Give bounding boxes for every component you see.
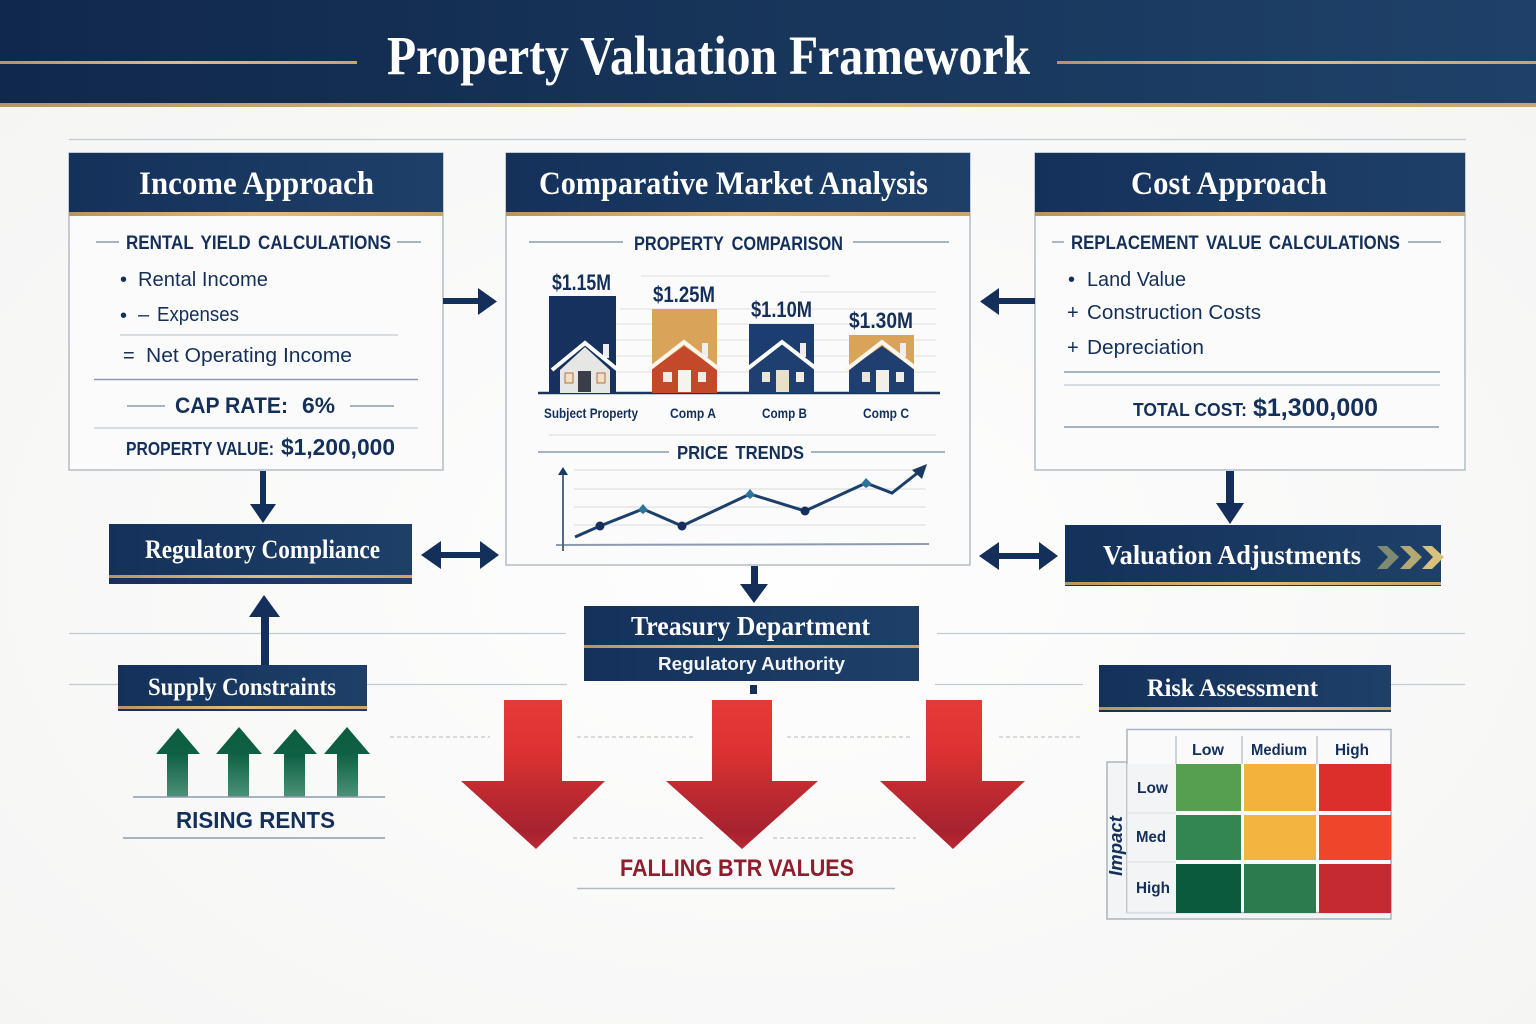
- arrow: market analysis to valuation adjustments: [979, 542, 1058, 570]
- axis labels: properties: Comp B: [762, 405, 807, 421]
- text: cost calculation lines: [1064, 269, 1440, 385]
- axis labels: properties: [544, 405, 909, 421]
- text: total cost: [1133, 394, 1378, 422]
- text: property value: $1,200,000: [281, 434, 395, 460]
- arrow: regulatory to market analysis: [421, 541, 499, 569]
- text: regulatory authority: Regulatory Authority: [658, 654, 845, 674]
- box: valuation adjustments: Valuation Adjustments: [1103, 540, 1361, 570]
- column labels: [1192, 742, 1369, 759]
- text: total cost: $1,300,000: [1253, 394, 1378, 422]
- text: income calculation lines: =: [123, 345, 135, 367]
- text: cap rate: 6%: [302, 393, 335, 418]
- text: cost calculation lines: +: [1067, 337, 1079, 359]
- panel: cost approach: [1035, 153, 1465, 470]
- heading: comparative market analysis: Comparative Market Analysis: [539, 166, 928, 202]
- text: cost calculation lines: Construction Costs: [1087, 302, 1261, 324]
- icon: falling value arrows: [461, 700, 1025, 849]
- arrow: income to market analysis: [443, 288, 497, 315]
- text: income calculation lines: –: [138, 304, 150, 326]
- axis labels: properties: Subject Property: [544, 405, 638, 421]
- panel: income approach: [69, 153, 443, 470]
- text: income calculation lines: Net Operating Income: [146, 345, 352, 367]
- subheading: replacement value calculations: REPLACEMENT VALUE CALCULATIONS: [1071, 233, 1400, 254]
- axis label: impact: Impact: [1106, 815, 1126, 876]
- text: total cost: TOTAL COST:: [1133, 400, 1247, 420]
- heading: income approach: Income Approach: [139, 166, 374, 202]
- text: cost calculation lines: Depreciation: [1087, 337, 1204, 359]
- text: property value: PROPERTY VALUE:: [126, 439, 274, 459]
- text: income calculation lines: Rental Income: [138, 269, 268, 291]
- text: income calculation lines: •: [120, 305, 127, 327]
- row labels: [1136, 780, 1170, 897]
- bar: comp C: [846, 308, 918, 393]
- title: Property Valuation Framework: [387, 25, 1030, 86]
- panel: comparative market analysis: [506, 153, 970, 565]
- row labels: High: [1136, 880, 1170, 897]
- line chart: price trends: [556, 464, 929, 551]
- box: regulatory compliance: Regulatory Compliance: [145, 535, 380, 564]
- subheading: rental yield calculations: RENTAL YIELD CALCULATIONS: [126, 233, 391, 254]
- text: income calculation lines: [94, 269, 418, 380]
- box: supply constraints: Supply Constraints: [148, 674, 336, 701]
- bar: subject property: [549, 270, 618, 393]
- icon: gold chevrons: [1377, 546, 1444, 569]
- icon: rising rents arrows: [156, 727, 370, 797]
- text: cost calculation lines: •: [1068, 269, 1075, 291]
- bar chart: property comparison: [538, 270, 940, 421]
- column labels: High: [1335, 742, 1369, 759]
- row labels: Low: [1137, 780, 1169, 797]
- text: cap rate: CAP RATE:: [175, 393, 288, 418]
- box: risk assessment: Risk Assessment: [1147, 675, 1319, 702]
- text: income calculation lines: Expenses: [157, 304, 239, 326]
- arrow: cost to valuation adjustments: [1216, 471, 1244, 524]
- title banner: [0, 0, 1536, 107]
- bar: comp B: [746, 297, 818, 393]
- box: risk assessment: [1099, 665, 1391, 712]
- subheading: price trends: PRICE TRENDS: [677, 443, 804, 463]
- subheading: property comparison: PROPERTY COMPARISON: [634, 234, 843, 255]
- risk matrix: [1106, 730, 1391, 919]
- arrow: income to regulatory compliance: [250, 471, 276, 523]
- bar: subject property: $1.15M: [552, 270, 611, 295]
- bar: comp C: $1.30M: [849, 308, 913, 333]
- box: valuation adjustments: [1065, 525, 1444, 586]
- text: cost calculation lines: +: [1067, 302, 1079, 324]
- column labels: Medium: [1251, 742, 1307, 759]
- text: property value: [126, 434, 395, 460]
- bar: comp A: [648, 282, 720, 393]
- text: falling BTR values: FALLING BTR VALUES: [620, 855, 854, 882]
- axis labels: properties: Comp A: [670, 405, 716, 421]
- arrow: market analysis to treasury: [740, 566, 768, 603]
- heatmap cells: [1176, 764, 1391, 913]
- column labels: Low: [1192, 742, 1225, 759]
- row labels: Med: [1136, 829, 1166, 846]
- text: income calculation lines: •: [120, 269, 127, 291]
- arrow: cost to market analysis: [980, 288, 1035, 315]
- heading: cost approach: Cost Approach: [1131, 166, 1327, 202]
- text: cap rate: [127, 393, 394, 418]
- bar: comp A: $1.25M: [653, 282, 715, 307]
- axis labels: properties: Comp C: [863, 405, 909, 421]
- bar: comp B: $1.10M: [751, 297, 812, 322]
- box: treasury department: [584, 606, 919, 681]
- arrow: supply constraints to regulatory: [249, 595, 280, 665]
- box: supply constraints: [118, 665, 367, 711]
- box: treasury department: Treasury Department: [631, 611, 870, 641]
- text: cost calculation lines: Land Value: [1087, 269, 1186, 291]
- box: regulatory compliance: [109, 524, 412, 584]
- text: rising rents: RISING RENTS: [176, 807, 335, 833]
